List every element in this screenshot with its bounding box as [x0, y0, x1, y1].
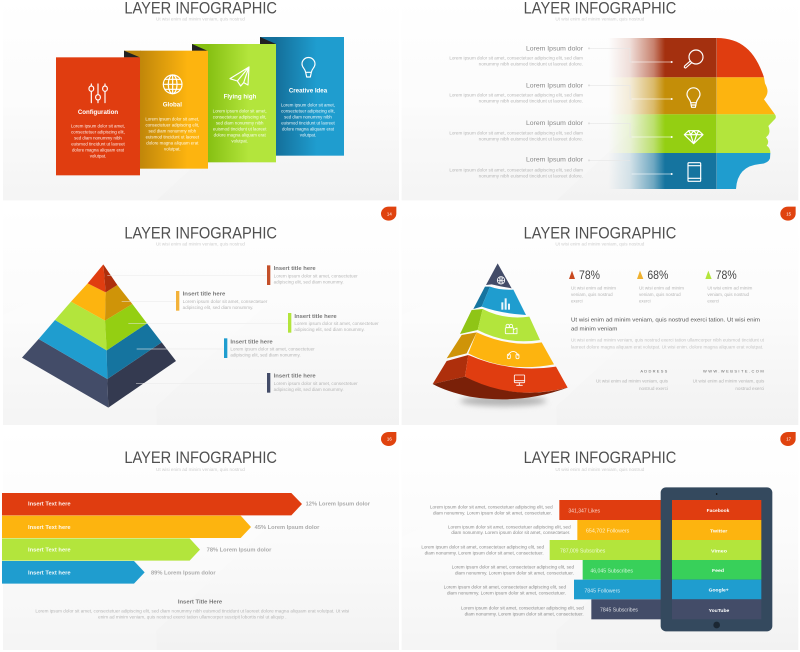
tablet: Google+ [709, 588, 729, 594]
website [693, 368, 764, 391]
card: global: Global [163, 101, 182, 108]
stat: 78%: Ut wisi enim ad minim [571, 285, 616, 290]
text block 3 [449, 120, 583, 141]
callout 3 [288, 313, 379, 333]
text block 4: Lorem Ipsum dolor [526, 157, 583, 164]
page badge: 16 [387, 437, 392, 442]
subtitle: Ut wisi enim ad minim veniam, quis nostrud [555, 467, 645, 472]
icon: tablet [688, 163, 701, 181]
card: configuration: consectetuer adipiscing elit, [71, 130, 125, 135]
tablet: Facebook [707, 508, 730, 514]
descriptions: Lorem ipsum dolor sit amet, consectetuer adipiscing elit, sed [452, 565, 575, 570]
text block 1 [449, 45, 583, 67]
arrow bar 4: 89% Lorem Ipsum dolor [151, 571, 216, 577]
icon: monitor [514, 375, 525, 385]
body text [571, 317, 765, 350]
curved pyramid [433, 263, 568, 406]
connector lines [588, 47, 673, 175]
stat bars: 787,009 Subscribes [560, 548, 606, 554]
icon: diamond [684, 131, 703, 144]
tablet: Twitter [710, 528, 727, 534]
stat: 68%: exerci [639, 299, 651, 304]
card: global: sed diam nonummy nibh [148, 128, 197, 133]
descriptions: Lorem ipsum dolor sit amet, consectetuer adipiscing elit, sed [448, 524, 571, 529]
card: flying high: euismod tincidunt ut laoreet [213, 126, 267, 131]
card: creative idea: dolore magna aliquam erat [282, 126, 335, 131]
body text: ad minim veniam [571, 326, 618, 332]
callout 2 [176, 291, 268, 311]
page badge [780, 432, 796, 446]
card: creative idea [260, 37, 344, 156]
arrow bar 3 [2, 538, 272, 561]
stat: 78%: exerci [707, 299, 719, 304]
descriptions: diam nonummy. Lorem ipsum dolor sit amet, consectetuer. [447, 590, 566, 595]
callout 5: adipiscing elit, sed diam nonummy. [274, 387, 344, 392]
text block 1: Lorem ipsum dolor sit amet, consectetuer adipiscing elit, sed diam [449, 56, 583, 61]
callout 2: Lorem ipsum dolor sit amet, consectetuer [183, 299, 268, 304]
stat: 78%: veniam, quis nostrud [707, 292, 750, 297]
arrow bar 1 [2, 493, 371, 515]
card: configuration: Lorem ipsum dolor sit amet, [71, 124, 125, 129]
card: global: Lorem ipsum dolor sit amet, [145, 116, 199, 121]
descriptions: diam nonummy. Lorem ipsum dolor sit amet, consectetuer. [455, 571, 574, 576]
tablet: Feed [712, 568, 724, 574]
descriptions: diam nonummy. Lorem ipsum dolor sit amet, consectetuer. [465, 611, 584, 616]
text block: Insert Title Here [178, 600, 222, 606]
stat bars [550, 500, 661, 619]
stat: 78%: exerci [571, 299, 583, 304]
stat: 78% [569, 268, 616, 304]
text block 3: Lorem Ipsum dolor [526, 120, 583, 127]
page badge [780, 207, 796, 221]
subtitle: Ut wisi enim ad minim veniam, quis nostrud [555, 17, 645, 22]
panel: slide 4 curved pyramid [402, 206, 798, 425]
text block 2 [449, 82, 583, 104]
stat: 68%: veniam, quis nostrud [639, 292, 681, 297]
stat: 78%: 78% [579, 268, 600, 282]
address: ADDRESS [640, 368, 668, 373]
stat: 68%: Ut wisi enim ad minim [639, 285, 684, 290]
website: nostrud exerci [735, 386, 764, 391]
page badge [381, 207, 396, 221]
page badge [381, 432, 396, 446]
stat: 78%: Ut wisi enim ad minim [707, 285, 753, 290]
callout 5 [267, 373, 358, 393]
text block 2: Lorem Ipsum dolor [526, 82, 583, 89]
card: creative idea: Creative Idea [289, 87, 328, 94]
subtitle: Ut wisi enim ad minim veniam, quis nostrud [156, 467, 246, 472]
descriptions: diam nonummy. Lorem ipsum dolor sit amet, consectetuer. [425, 550, 544, 555]
body text: Ut wisi enim ad minim veniam, quis nostrud exerci tation. Ut wisi enim [571, 317, 760, 323]
card: configuration: euismod tincidunt ut laoreet [71, 142, 126, 147]
text block: enim ad minim veniam, quis nostrud exerci tation ullamcorper suscipit lobortis nisl ut aliquip . [98, 615, 286, 620]
card: flying high: Lorem ipsum dolor sit amet, [213, 108, 267, 113]
descriptions [421, 505, 584, 616]
website: Ut wisi enim ad minim veniam, quis [693, 379, 764, 384]
card: configuration: volutpat. [90, 154, 106, 159]
callout 1: Insert title here [274, 266, 316, 272]
panel: slide 3 isometric pyramid [3, 206, 399, 425]
callout 3: adipiscing elit, sed diam nonummy. [294, 327, 365, 332]
descriptions: Lorem ipsum dolor sit amet, consectetuer adipiscing elit, sed [461, 605, 584, 610]
card: flying high: dolore magna aliquam erat [214, 132, 266, 137]
callout 4: adipiscing elit, sed diam nonummy. [230, 352, 301, 357]
callout 3: Insert title here [294, 314, 337, 320]
card: creative idea: Lorem ipsum dolor sit amet, [281, 102, 335, 107]
icon: bars [501, 298, 510, 310]
card: global: dolore magna aliquam erat [146, 140, 199, 145]
card: flying high: sed diam nonummy nibh [216, 120, 264, 125]
arrow bar 2: Insert Text here [28, 525, 71, 531]
arrow bar 2: 45% Lorem Ipsum dolor [255, 525, 320, 531]
arrow bar 4 [2, 561, 216, 584]
icon: headphones [507, 351, 519, 359]
title: LAYER INFOGRAPHIC [524, 448, 676, 467]
arrow bar 1: Insert Text here [28, 502, 71, 508]
subtitle: Ut wisi enim ad minim veniam, quis nostrud [555, 242, 645, 247]
card: global: volutpat. [164, 146, 181, 151]
icon: magnifier [684, 50, 703, 68]
card: configuration: Configuration [78, 109, 118, 116]
stat: 78%: veniam, quis nostrud [571, 292, 613, 297]
text block 2: Lorem ipsum dolor sit amet, consectetuer adipiscing elit, sed diam [449, 93, 583, 98]
icon: globe [497, 277, 505, 284]
text block 1: nonummy nibh euismod tincidunt ut laoreet dolore. [479, 62, 583, 67]
panel: slide 5 arrow bars [2, 429, 399, 650]
descriptions: Lorem ipsum dolor sit amet, consectetuer adipiscing elit, sed [430, 505, 553, 510]
stat: 68% [637, 268, 684, 304]
address: Ut wisi enim ad minim veniam, quis [596, 379, 668, 384]
descriptions: diam nonummy. Lorem ipsum dolor sit amet, consectetuer. [433, 510, 552, 515]
tablet: YouTube [709, 608, 730, 614]
panel: slide 6 tablet social [402, 429, 798, 650]
text block 2: nonummy nibh euismod tincidunt ut laoreet dolore. [479, 99, 583, 104]
tablet: Vimeo [711, 548, 727, 554]
callout 1: Lorem ipsum dolor sit amet, consectetuer [274, 273, 358, 278]
panel: slide 1 folded cards [3, 0, 399, 200]
text block 4 [449, 157, 583, 178]
callout 5: Lorem ipsum dolor sit amet, consectetuer [274, 381, 358, 386]
card: creative idea: euismod tincidunt ut laoreet [281, 120, 336, 125]
body text: Ut wisi enim ad minim veniam, quis nostrud exerci tation ullamcorper nibh euismod tincidunt ut [571, 338, 765, 343]
subtitle: Ut wisi enim ad minim veniam, quis nostrud [156, 242, 246, 247]
subtitle: Ut wisi enim ad minim veniam, quis nostrud [156, 17, 246, 22]
panel: slide 2 layered head [402, 0, 798, 200]
stat bars: 7845 Followers [584, 589, 620, 595]
head graphic [608, 38, 780, 189]
title: LAYER INFOGRAPHIC [124, 223, 277, 242]
text block 4: Lorem ipsum dolor sit amet, consectetuer adipiscing elit, sed diam [449, 167, 583, 172]
arrow bar 2 [2, 516, 320, 538]
text block 4: nonummy nibh euismod tincidunt ut laoreet dolore. [479, 173, 583, 178]
tablet [661, 487, 772, 631]
descriptions: Lorem ipsum dolor sit amet, consectetuer adipiscing elit, sed [421, 544, 545, 549]
callout 2: Insert title here [183, 292, 225, 298]
card: configuration [56, 57, 140, 175]
text block [35, 600, 349, 620]
card: configuration: sed diam nonummy nibh [74, 136, 122, 141]
text block 3: Lorem ipsum dolor sit amet, consectetuer adipiscing elit, sed diam [449, 130, 583, 135]
stat bars: 341,347 Likes [568, 508, 600, 514]
page badge: 14 [387, 211, 392, 216]
callout 4 [224, 338, 315, 358]
card: global: consectetuer adipiscing elit, [145, 122, 199, 127]
card: configuration: dolore magna aliquam erat [72, 148, 125, 153]
arrow bar 3: 78% Lorem Ipsum dolor [207, 548, 272, 554]
descriptions: Lorem ipsum dolor sit amet, consectetuer adipiscing elit, sed [444, 585, 567, 590]
title: LAYER INFOGRAPHIC [124, 448, 277, 467]
callout 1 [267, 265, 358, 285]
card: creative idea: volutpat. [300, 132, 316, 137]
website: WWW.WEBSITE.COM [703, 368, 764, 373]
title: LAYER INFOGRAPHIC [524, 223, 676, 242]
page badge: 15 [786, 211, 792, 216]
stat bars: 46,045 Subscribes [590, 568, 633, 574]
text block 3: nonummy nibh euismod tincidunt ut laoreet dolore. [479, 136, 583, 141]
callout 3: Lorem ipsum dolor sit amet, consectetuer [294, 321, 379, 326]
arrow bar 4: Insert Text here [28, 570, 71, 576]
callout 1: adipiscing elit, sed diam nonummy. [274, 279, 344, 284]
card: flying high [192, 44, 276, 162]
card: global [124, 51, 208, 169]
stat bars: 654,702 Followers [586, 528, 630, 534]
text block 1: Lorem Ipsum dolor [526, 45, 583, 52]
arrow bar 1: 12% Lorem Ipsum dolor [306, 502, 371, 508]
callout 5: Insert title here [274, 374, 316, 380]
card: flying high: Flying high [224, 94, 257, 101]
card: global: euismod tincidunt ut laoreet [146, 134, 200, 139]
stat: 78%: 78% [716, 268, 737, 282]
text block: Lorem ipsum dolor sit amet, consectetuer adipiscing elit, sed diam nonummy nibh euismod tincidunt ut laoreet dolore magna aliquam erat volutpat. Ut wisi [35, 608, 349, 613]
address [596, 368, 668, 391]
card: creative idea: sed diam nonummy nibh [284, 114, 332, 119]
card: flying high: volutpat. [231, 138, 248, 143]
card: flying high: consectetuer adipiscing elit, [213, 114, 267, 119]
callout 4: Lorem ipsum dolor sit amet, consectetuer [230, 346, 315, 351]
icon: light bulb [687, 88, 700, 107]
stat: 68%: 68% [647, 268, 669, 282]
callout 4: Insert title here [230, 339, 273, 345]
arrow bar 3: Insert Text here [28, 547, 71, 553]
body text: laoreet dolore magna aliquam erat volutpat. Ut wisi enim. dolore magna aliquam erat volutpat. [571, 345, 763, 350]
stat bars: 7845 Subscribes [600, 608, 638, 614]
stat: 78% [705, 268, 753, 304]
pyramid [22, 264, 176, 408]
page badge: 17 [786, 437, 792, 442]
icon: camera [505, 324, 517, 334]
address: nostrud exerci [639, 386, 668, 391]
callout 2: adipiscing elit, sed diam nonummy. [183, 305, 253, 310]
leader lines [107, 275, 288, 383]
descriptions: diam nonummy. Lorem ipsum dolor sit amet, consectetuer. [451, 530, 570, 535]
card: creative idea: consectetuer adipiscing elit, [281, 108, 335, 113]
